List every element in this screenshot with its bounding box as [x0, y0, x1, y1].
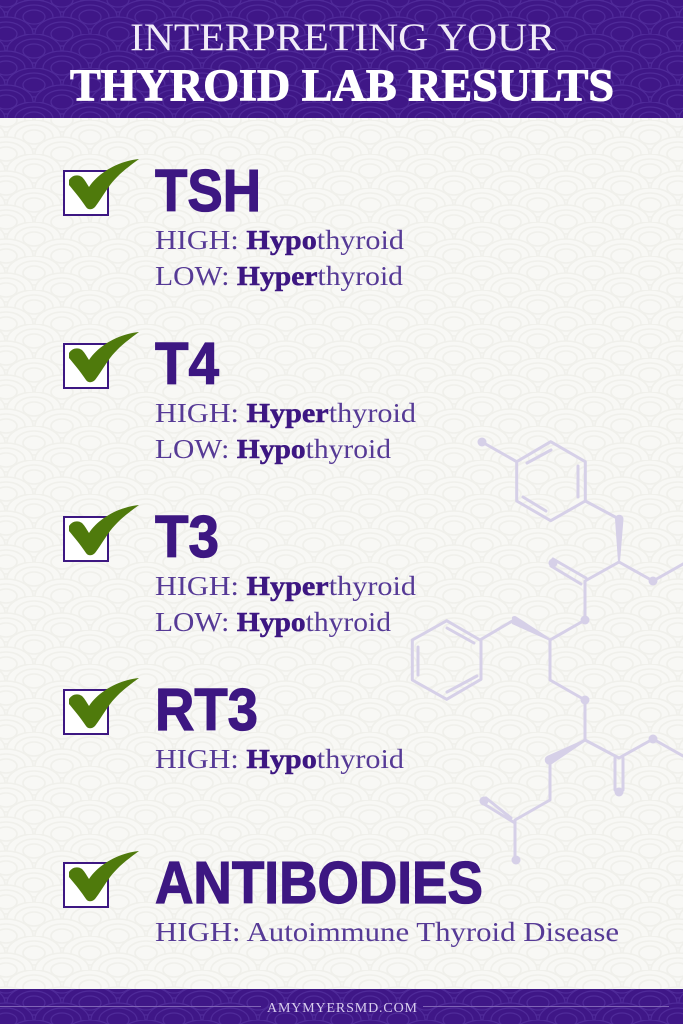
- icon: checkbox with check: [64, 851, 139, 907]
- item: Antibodies: [64, 850, 619, 947]
- heading: T3: [155, 504, 219, 570]
- icon: checkbox with check: [64, 505, 139, 561]
- molecule diagram: [412, 438, 683, 864]
- result: low: LOW: Hypothyroid: [155, 607, 392, 637]
- footer url: AMYMYERSMD.COM: [267, 1001, 418, 1016]
- result: low: LOW: Hypothyroid: [155, 434, 392, 464]
- heading: T4: [155, 331, 219, 397]
- heading: ANTIBODIES: [155, 850, 483, 916]
- title line 1: INTERPRETING YOUR: [130, 16, 555, 59]
- result: high: HIGH: Hyper thyroid: [155, 571, 417, 601]
- result: low: LOW: Hyper thyroid: [155, 261, 404, 291]
- title line 2: THYROID LAB RESULTS: [70, 60, 614, 110]
- icon: checkbox with check: [64, 332, 139, 388]
- footer band: [0, 989, 683, 1024]
- item: T4: [64, 331, 417, 464]
- item: TSH: [64, 158, 405, 291]
- header band: [0, 0, 683, 118]
- item: T3: [64, 504, 417, 637]
- heading: TSH: [155, 158, 261, 224]
- result: high: HIGH: Hypo thyroid: [155, 225, 405, 255]
- item: RT3: [64, 677, 405, 774]
- heading: RT3: [155, 677, 258, 743]
- icon: checkbox with check: [64, 678, 139, 734]
- icon: checkbox with check: [64, 159, 139, 215]
- result: high: HIGH: Hypo thyroid: [155, 744, 405, 774]
- result: high: HIGH: Autoimmune Thyroid Disease: [155, 917, 619, 947]
- result: high: HIGH: Hyper thyroid: [155, 398, 417, 428]
